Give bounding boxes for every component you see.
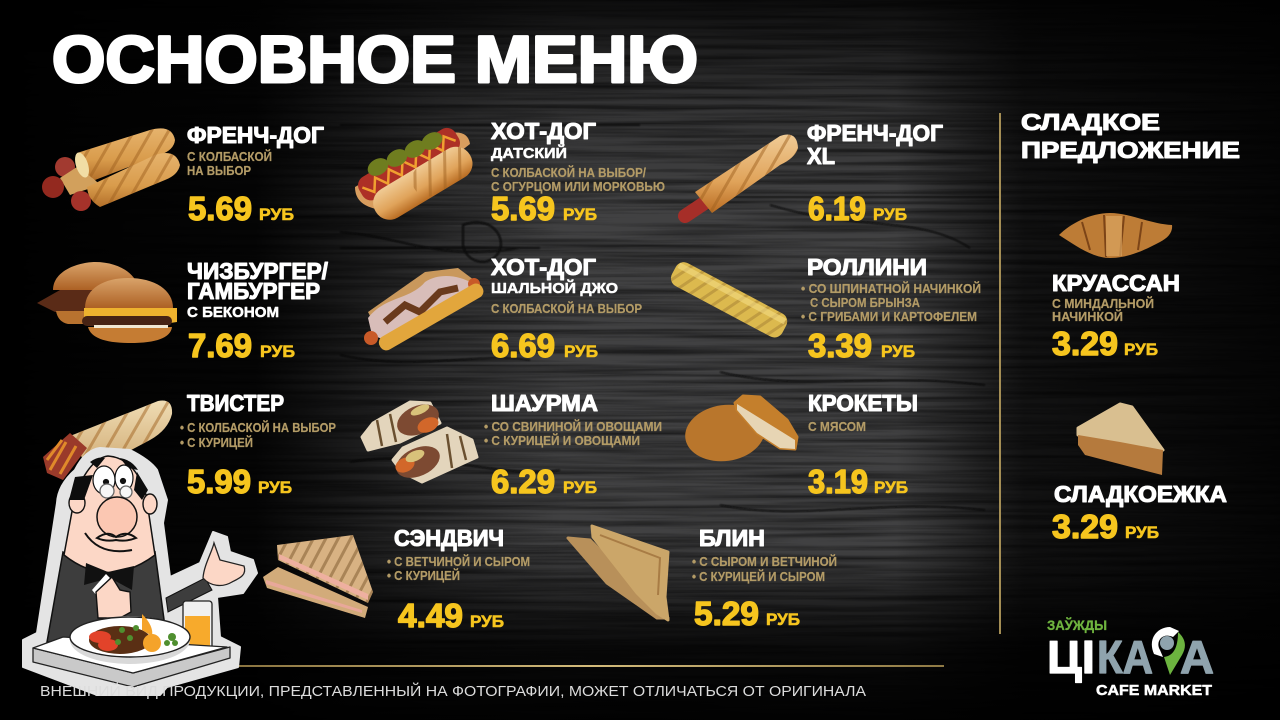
item: круассан: 3.29 bbox=[1052, 325, 1118, 362]
sweet heading bbox=[1021, 109, 1240, 163]
food: french dog XL bbox=[685, 134, 798, 216]
icon: map pin bbox=[1152, 627, 1185, 675]
item: крокеты: РУБ bbox=[874, 479, 908, 497]
item: твистер: ТВИСТЕР bbox=[187, 390, 284, 416]
food: cheeseburger bbox=[37, 262, 177, 343]
food: french dog bbox=[42, 128, 180, 211]
item: чизбургер: 7.69 bbox=[188, 327, 252, 364]
item: шаурма: ШАУРМА bbox=[491, 390, 598, 416]
item: френч-дог: С КОЛБАСКОЙ bbox=[187, 149, 272, 164]
item: френч-дог: РУБ bbox=[259, 206, 294, 224]
item: роллини: • СО ШПИНАТНОЙ НАЧИНКОЙ bbox=[801, 281, 981, 296]
food: sandwich bbox=[263, 535, 373, 618]
item: френч-дог XL: ФРЕНЧ-ДОГ bbox=[807, 120, 943, 146]
item: сэндвич: 4.49 bbox=[398, 597, 463, 634]
item: сладкоежка: СЛАДКОЕЖКА bbox=[1054, 481, 1227, 507]
logo: CAFE MARKET bbox=[1096, 682, 1212, 699]
food: crazy joe hot dog bbox=[364, 268, 486, 353]
item: чизбургер: РУБ bbox=[260, 343, 295, 361]
jacket bbox=[47, 552, 167, 642]
item: шаурма bbox=[484, 390, 662, 500]
item: блин: БЛИН bbox=[699, 525, 765, 551]
item: сладкоежка bbox=[1052, 481, 1227, 545]
food: croissant bbox=[1059, 213, 1172, 258]
item: блин bbox=[692, 525, 837, 632]
item: шаурма: • С КУРИЦЕЙ И ОВОЩАМИ bbox=[484, 433, 640, 448]
item: френч-дог XL bbox=[807, 120, 943, 227]
hair bbox=[69, 458, 148, 500]
item: роллини bbox=[801, 254, 981, 364]
item: круассан bbox=[1052, 270, 1180, 362]
thumbs up hand bbox=[96, 577, 131, 618]
sweet heading: СЛАДКОЕ bbox=[1021, 109, 1160, 135]
item: роллини: • С ГРИБАМИ И КАРТОФЕЛЕМ bbox=[801, 310, 977, 324]
item: блин: 5.29 bbox=[694, 595, 759, 632]
item: хот-дог датский: РУБ bbox=[563, 206, 597, 224]
item: хот-дог шальной джо: ШАЛЬНОЙ ДЖО bbox=[491, 279, 618, 297]
item: роллини: 3.39 bbox=[808, 327, 872, 364]
item: крокеты: С МЯСОМ bbox=[808, 420, 866, 434]
item: сэндвич: СЭНДВИЧ bbox=[394, 525, 504, 551]
item: твистер: 5.99 bbox=[187, 463, 251, 500]
item: хот-дог датский: С ОГУРЦОМ ИЛИ МОРКОВЬЮ bbox=[491, 180, 665, 194]
vertical divider bbox=[999, 113, 1001, 634]
mascot sticker bbox=[23, 448, 257, 695]
bow tie bbox=[84, 563, 134, 590]
sticker outline bbox=[23, 448, 257, 695]
item: френч-дог bbox=[187, 122, 324, 227]
food: rollini bbox=[668, 259, 790, 341]
item: роллини: С СЫРОМ БРЫНЗА bbox=[810, 296, 920, 310]
item: френч-дог: 5.69 bbox=[188, 190, 252, 227]
food: croquettes bbox=[681, 396, 797, 466]
food: blini bbox=[568, 526, 668, 620]
head bbox=[64, 456, 155, 572]
item: круассан: КРУАССАН bbox=[1052, 270, 1180, 296]
item: твистер bbox=[180, 390, 336, 500]
item: шаурма: 6.29 bbox=[491, 463, 555, 500]
glasses bbox=[100, 484, 132, 498]
item: сэндвич bbox=[387, 525, 530, 634]
item: шаурма: РУБ bbox=[563, 479, 597, 497]
item: сладкоежка: 3.29 bbox=[1052, 508, 1118, 545]
item: твистер: • С КУРИЦЕЙ bbox=[180, 435, 253, 450]
item: чизбургер: ГАМБУРГЕР bbox=[187, 278, 320, 304]
item: роллини: РОЛЛИНИ bbox=[807, 254, 927, 280]
item: френч-дог XL: XL bbox=[807, 143, 835, 169]
item: чизбургер bbox=[187, 258, 329, 364]
title: ОСНОВНОЕ МЕНЮ bbox=[52, 22, 698, 96]
item: блин: • С КУРИЦЕЙ И СЫРОМ bbox=[692, 569, 825, 584]
food: wafer cake bbox=[1078, 404, 1163, 475]
item: френч-дог: ФРЕНЧ-ДОГ bbox=[187, 122, 324, 148]
item: хот-дог шальной джо: 6.69 bbox=[491, 327, 555, 364]
item: твистер: РУБ bbox=[258, 479, 292, 497]
item: хот-дог шальной джо: ХОТ-ДОГ bbox=[491, 254, 596, 280]
logo: А bbox=[1180, 631, 1214, 683]
logo bbox=[1047, 616, 1214, 699]
item: круассан: С МИНДАЛЬНОЙ bbox=[1052, 296, 1154, 311]
item: чизбургер: ЧИЗБУРГЕР/ bbox=[187, 258, 329, 284]
item: хот-дог шальной джо bbox=[491, 254, 642, 364]
item: хот-дог датский bbox=[491, 118, 665, 227]
item: хот-дог датский: С КОЛБАСКОЙ НА ВЫБОР/ bbox=[491, 165, 646, 180]
bottom gold rule bbox=[238, 665, 944, 667]
logo: ЦІ bbox=[1047, 631, 1095, 683]
shirt strip bbox=[92, 574, 110, 596]
item: круассан: РУБ bbox=[1124, 341, 1158, 359]
item: сэндвич: • С КУРИЦЕЙ bbox=[387, 568, 460, 583]
glass of juice bbox=[183, 601, 212, 651]
footer disclaimer: ВНЕШНИЙ ВИД ПРОДУКЦИИ, ПРЕДСТАВЛЕННЫЙ НА ФОТОГРАФИИ, МОЖЕТ ОТЛИЧАТЬСЯ ОТ ОРИГИНАЛА bbox=[40, 682, 866, 700]
moustache and smile bbox=[85, 533, 136, 551]
eyes bbox=[93, 465, 133, 494]
open hand bbox=[203, 543, 245, 585]
item: крокеты: 3.19 bbox=[808, 463, 868, 500]
item: хот-дог датский: ДАТСКИЙ bbox=[491, 144, 567, 162]
item: сладкоежка: РУБ bbox=[1125, 524, 1159, 542]
nose bbox=[97, 497, 137, 537]
item: роллини: РУБ bbox=[881, 343, 915, 361]
item: хот-дог датский: ХОТ-ДОГ bbox=[491, 118, 596, 144]
food: danish hot dog bbox=[354, 124, 478, 226]
item: крокеты: КРОКЕТЫ bbox=[808, 390, 918, 416]
tray bbox=[33, 637, 230, 687]
item: круассан: НАЧИНКОЙ bbox=[1052, 309, 1123, 324]
item: чизбургер: С БЕКОНОМ bbox=[187, 305, 279, 321]
plate of food bbox=[70, 614, 190, 664]
item: сэндвич: РУБ bbox=[470, 613, 504, 631]
item: блин: • С СЫРОМ И ВЕТЧИНОЙ bbox=[692, 554, 837, 569]
item: хот-дог шальной джо: С КОЛБАСКОЙ НА ВЫБОР bbox=[491, 301, 642, 316]
item: твистер: • С КОЛБАСКОЙ НА ВЫБОР bbox=[180, 420, 336, 435]
item: сэндвич: • С ВЕТЧИНОЙ И СЫРОМ bbox=[387, 554, 530, 569]
item: френч-дог XL: РУБ bbox=[873, 206, 907, 224]
item: френч-дог: НА ВЫБОР bbox=[187, 164, 251, 178]
logo: ЗАЎЖДЫ bbox=[1047, 616, 1107, 633]
item: френч-дог XL: 6.19 bbox=[808, 190, 866, 227]
right arm bbox=[166, 578, 212, 612]
item: блин: РУБ bbox=[766, 611, 800, 629]
sweet heading: ПРЕДЛОЖЕНИЕ bbox=[1021, 137, 1240, 163]
logo: КА bbox=[1097, 631, 1153, 683]
food: shawarma bbox=[362, 398, 477, 484]
item: хот-дог шальной джо: РУБ bbox=[564, 343, 598, 361]
ears bbox=[69, 493, 157, 514]
food: twister bbox=[43, 401, 172, 480]
item: хот-дог датский: 5.69 bbox=[491, 190, 555, 227]
item: шаурма: • СО СВИНИНОЙ И ОВОЩАМИ bbox=[484, 419, 662, 434]
item: крокеты bbox=[808, 390, 918, 500]
